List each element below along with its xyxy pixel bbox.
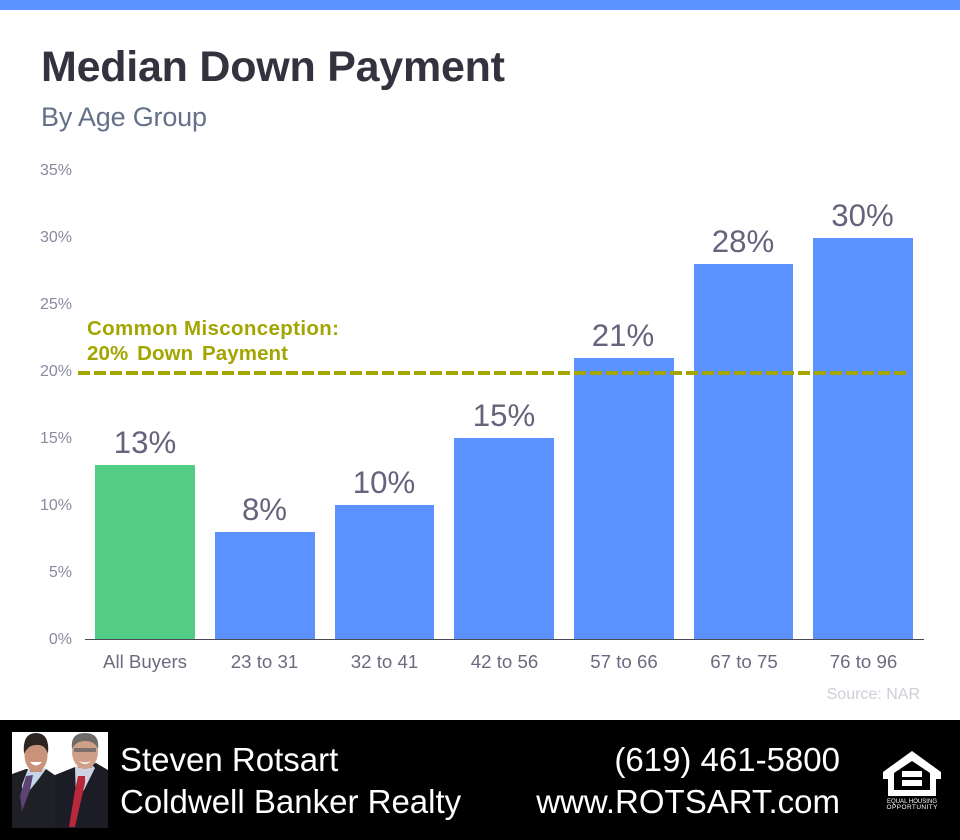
agent photo xyxy=(12,732,108,828)
category labels xyxy=(103,651,897,672)
x axis line xyxy=(85,639,924,640)
bar value labels: 10% xyxy=(353,465,415,500)
misconception callout: 20% Down Payment xyxy=(87,342,288,365)
y axis labels: 35% xyxy=(40,162,72,179)
brokerage: Coldwell Banker Realty xyxy=(120,783,462,820)
category labels: 42 to 56 xyxy=(471,651,538,672)
bar chart xyxy=(95,238,913,639)
y axis labels: 20% xyxy=(40,363,72,380)
footer band xyxy=(0,720,960,840)
category labels: 67 to 75 xyxy=(710,651,778,672)
website: www.ROTSART.com xyxy=(535,783,840,820)
bar value labels: 30% xyxy=(831,198,894,233)
subtitle: By Age Group xyxy=(41,102,207,132)
bar value labels xyxy=(114,198,894,527)
phone: (619) 461-5800 xyxy=(614,741,840,778)
bar: 76 to 96 xyxy=(813,238,913,639)
bar value labels: 13% xyxy=(114,425,176,460)
icon: equal housing opportunity xyxy=(883,751,941,811)
category labels: 57 to 66 xyxy=(590,651,658,672)
bar value labels: 28% xyxy=(712,224,774,259)
category labels: 32 to 41 xyxy=(351,651,418,672)
icon: equal housing opportunity: EQUAL HOUSING xyxy=(887,799,937,805)
y axis labels: 0% xyxy=(49,631,72,648)
title: Median Down Payment xyxy=(41,43,505,91)
agent name: Steven Rotsart xyxy=(120,741,338,778)
bar: 32 to 41 xyxy=(335,505,434,639)
20% reference line xyxy=(78,371,907,375)
y axis labels: 25% xyxy=(40,296,72,313)
y axis labels: 5% xyxy=(49,564,72,581)
bar: 23 to 31 xyxy=(215,532,315,639)
bar value labels: 21% xyxy=(592,318,654,353)
bar value labels: 8% xyxy=(242,492,287,527)
source note: Source: NAR xyxy=(827,686,920,703)
y axis labels: 30% xyxy=(40,229,72,246)
right agent xyxy=(55,733,108,828)
category labels: All Buyers xyxy=(103,651,187,672)
category labels: 76 to 96 xyxy=(830,651,897,672)
bar: All Buyers xyxy=(95,465,195,639)
y axis labels: 10% xyxy=(40,497,72,514)
y axis labels: 15% xyxy=(40,430,72,447)
left agent xyxy=(12,733,62,828)
bar: 57 to 66 xyxy=(574,358,674,639)
misconception callout xyxy=(87,317,339,365)
category labels: 23 to 31 xyxy=(231,651,298,672)
misconception callout: Common Misconception: xyxy=(87,317,339,340)
bar value labels: 15% xyxy=(473,398,535,433)
top accent bar xyxy=(0,0,960,10)
bar: 67 to 75 xyxy=(694,264,793,639)
bar: 42 to 56 xyxy=(454,438,554,639)
y axis labels xyxy=(40,162,72,648)
icon: equal housing opportunity: OPPORTUNITY xyxy=(886,804,938,811)
